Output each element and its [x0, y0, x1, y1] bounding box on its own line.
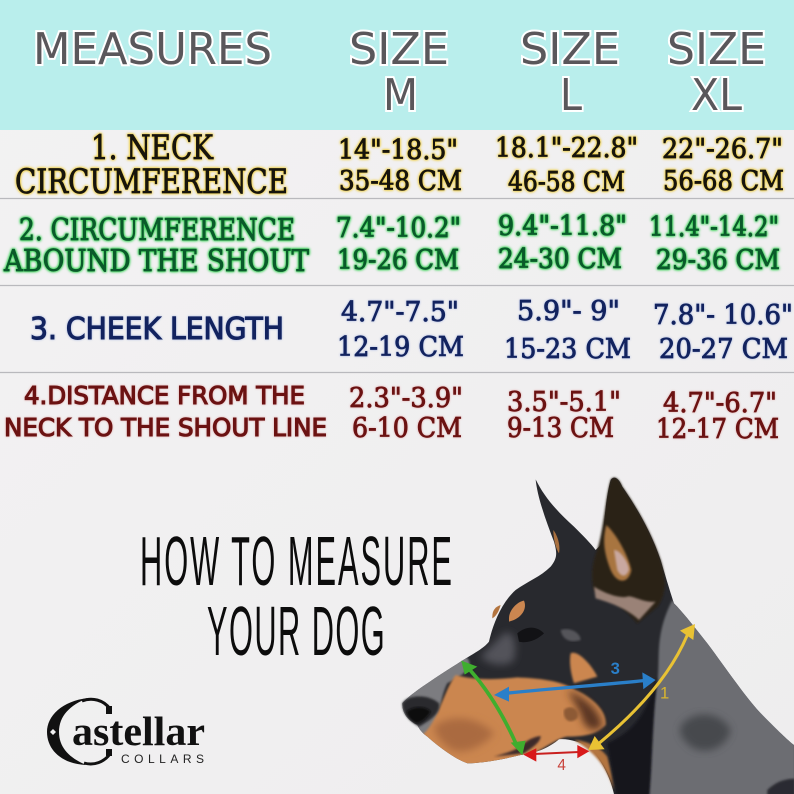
- values size XL: 22"-26.7": [662, 134, 783, 165]
- heading: size XL: [667, 24, 766, 121]
- values size M: 19-26 CM: [337, 245, 459, 276]
- row label: CIRCUMFERENCE: [15, 162, 288, 202]
- row label: ABOUND THE SHOUT: [3, 244, 309, 279]
- heading: size L: SIZE: [520, 24, 620, 75]
- values size L: 5.9"- 9": [517, 296, 620, 327]
- values size L: [498, 211, 627, 275]
- values size M: 12-19 CM: [337, 332, 464, 363]
- heading: measures: MEASURES: [33, 24, 272, 75]
- values size L: 9-13 CM: [507, 413, 614, 444]
- arrow 3: blue cheek length: [494, 659, 656, 702]
- row label: 3. CHEEK LENGTH: [30, 312, 284, 347]
- values size L: 46-58 CM: [508, 167, 625, 198]
- values size L: [504, 296, 631, 365]
- title: how to measure your dog: YOUR DOG: [207, 593, 385, 671]
- values size M: 14"-18.5": [338, 135, 458, 166]
- heading: size M: [349, 24, 449, 121]
- heading: size XL: XL: [691, 70, 742, 121]
- values size XL: 12-17 CM: [656, 414, 779, 445]
- arrow 1: yellow neck: [588, 624, 695, 750]
- values size M: 2.3"-3.9": [349, 383, 463, 414]
- row label: NECK TO THE SHOUT LINE: [4, 413, 327, 442]
- arrow 4: red distance: [523, 745, 589, 774]
- arrow 4: red distance: 4: [557, 757, 566, 774]
- values size XL: 4.7"-6.7": [663, 388, 777, 419]
- head highlights: [402, 658, 471, 734]
- heading: size M: SIZE: [349, 24, 449, 75]
- values size M: [337, 297, 464, 363]
- row label: [3, 213, 309, 279]
- row label: 2. CIRCUMFERENCE: [19, 213, 295, 248]
- nose: [402, 696, 439, 727]
- values size M: [338, 135, 462, 197]
- arrow 1: yellow neck: 1: [660, 683, 669, 702]
- heading: size L: [520, 24, 620, 121]
- row label: 4.DISTANCE FROM THE: [24, 381, 305, 410]
- dog body silhouette: [402, 478, 794, 794]
- dog shading, clipped to silhouette: [394, 600, 794, 794]
- tan muzzle: [422, 675, 606, 767]
- values size M: [349, 383, 463, 444]
- values size XL: [662, 134, 784, 197]
- values size L: [495, 133, 638, 198]
- throat shadow: [607, 677, 657, 794]
- title: how to measure your dog: HOW TO MEASURE: [140, 523, 452, 601]
- heading: size L: L: [560, 70, 582, 121]
- values size M: 7.4"-10.2": [336, 213, 461, 244]
- values size L: [507, 387, 621, 444]
- row label: [15, 128, 288, 202]
- row label: [4, 381, 327, 442]
- arrow 2: green snout: [461, 661, 526, 755]
- values size XL: [649, 212, 780, 276]
- values size XL: [653, 300, 793, 365]
- dog photo illustration: [394, 478, 794, 794]
- values size XL: 56-68 CM: [663, 166, 784, 197]
- lip line: [494, 736, 541, 757]
- logo: castellar collars: COLLARS: [121, 752, 204, 766]
- heading: size XL: SIZE: [667, 24, 766, 75]
- header band: [0, 0, 794, 130]
- logo: castellar collars: [47, 698, 205, 766]
- values size XL: 20-27 CM: [659, 334, 788, 365]
- title: how to measure your dog: [140, 523, 452, 671]
- eye: [517, 628, 544, 642]
- near ear: [592, 478, 665, 623]
- values size M: [336, 213, 461, 276]
- heading: size M: M: [383, 70, 418, 121]
- tan cheek and brow marks: [570, 653, 597, 683]
- values size M: 35-48 CM: [339, 166, 462, 197]
- row 3: cheek length: [30, 296, 793, 365]
- values size XL: 29-36 CM: [656, 245, 780, 276]
- logo: castellar collars: astellar: [72, 708, 205, 754]
- values size XL: [656, 388, 779, 445]
- values size M: 4.7"-7.5": [341, 297, 459, 328]
- values size M: 6-10 CM: [352, 413, 462, 444]
- values size L: 18.1"-22.8": [495, 133, 638, 164]
- arrow 3: blue cheek length: 3: [611, 659, 620, 678]
- row label: 1. NECK: [91, 128, 213, 168]
- row 4: distance from neck to snout line: [4, 381, 779, 445]
- far ear inner mark: [553, 530, 559, 553]
- values size L: 3.5"-5.1": [507, 387, 621, 418]
- neck fur: [647, 600, 794, 794]
- row 1: neck circumference: [15, 128, 784, 202]
- values size L: 15-23 CM: [504, 334, 631, 365]
- row 2: circumference around the snout: [3, 211, 780, 279]
- values size L: 24-30 CM: [498, 244, 622, 275]
- values size L: 9.4"-11.8": [498, 211, 627, 242]
